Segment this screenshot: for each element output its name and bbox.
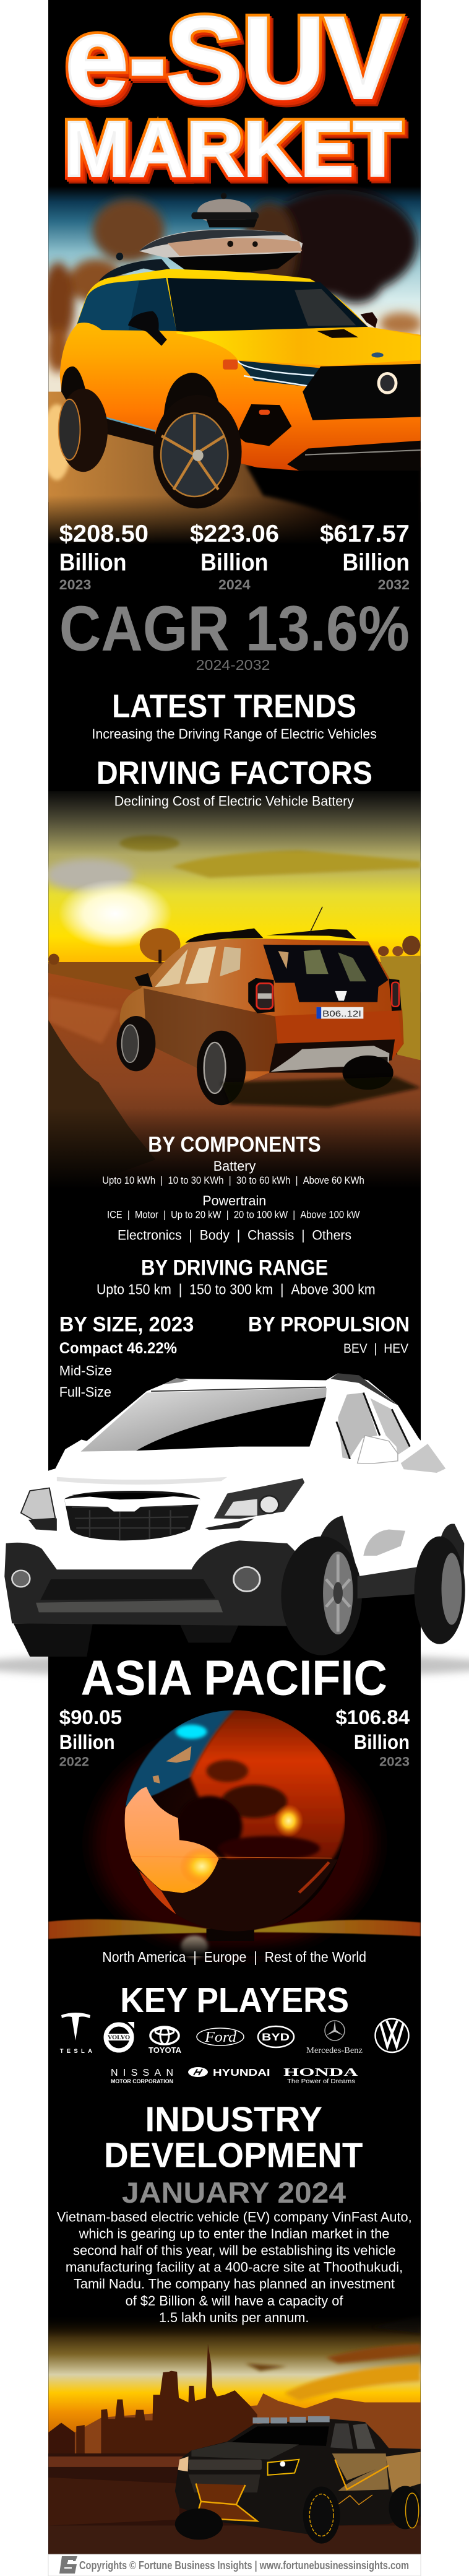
Asia Pacific 2023 value <box>335 1706 410 1769</box>
stat 2024: 2024 <box>218 577 251 592</box>
number plate <box>316 1007 363 1019</box>
sunset top fade <box>48 786 421 854</box>
car ground shadow <box>0 1653 469 1678</box>
white SUV image <box>4 1373 465 1657</box>
heading: BY DRIVING RANGE <box>141 1255 328 1280</box>
logo: Toyota: TOYOTA <box>148 2045 182 2055</box>
roof cargo pod <box>99 193 303 281</box>
mirrors <box>128 311 167 346</box>
other components: Electronics | Body | Chassis | Others <box>118 1228 351 1243</box>
side gold reflection <box>332 2453 389 2491</box>
industry development text: second half of this year, will be establishing its vehicle <box>73 2243 396 2258</box>
industry development heading: INDUSTRY <box>145 2100 322 2140</box>
battery options: Upto 10 kWh | 10 to 30 KWh | 30 to 60 kWh | Above 60 KWh <box>102 1174 364 1186</box>
stat 2024: $223.06 <box>190 521 279 547</box>
Asia Pacific 2022 value: $90.05 <box>59 1706 122 1728</box>
footer <box>48 2554 421 2576</box>
logo: Nissan <box>111 2068 173 2084</box>
logo: Honda: The Power of Dreams <box>287 2078 355 2085</box>
stat 2032: 2032 <box>378 577 410 592</box>
industry development text: 1.5 lakh units per annum. <box>159 2310 309 2325</box>
grille <box>189 2460 262 2470</box>
globe bottom fade <box>48 1938 421 1956</box>
logo: Ford: Ford <box>204 2029 237 2045</box>
Asia Pacific 2022 value: Billion <box>59 1731 115 1753</box>
logo: Volkswagen <box>375 2019 408 2052</box>
truck image: city at dusk <box>48 2315 422 2554</box>
Asia Pacific 2022 value: 2022 <box>59 1755 89 1769</box>
light bar <box>252 2416 330 2424</box>
islands <box>153 1746 191 1784</box>
dusk sky <box>48 2315 421 2453</box>
logo: Nissan: NISSAN <box>111 2068 173 2078</box>
body <box>119 939 404 1088</box>
stat 2032: $617.57 <box>320 521 410 547</box>
globe sphere <box>125 1710 345 1932</box>
by driving range section <box>97 1255 376 1298</box>
stat 2023: $208.50 <box>59 521 148 547</box>
title line: e-SUV: e-SUV <box>69 0 405 127</box>
industry development text: Vietnam-based electric vehicle (EV) company VinFast Auto, <box>57 2209 412 2224</box>
hood <box>176 327 421 366</box>
logo <box>335 991 347 1001</box>
stat 2024 <box>190 521 279 592</box>
logo: Tesla <box>60 2013 92 2055</box>
sunset image: rear SUV on dirt road <box>45 791 421 1199</box>
city skyline <box>76 2344 257 2453</box>
regional image: glowing globe <box>48 1707 421 1958</box>
logo: Ford <box>197 2028 244 2045</box>
stat 2023 <box>59 521 148 592</box>
stat 2032 <box>320 521 410 592</box>
logo: Volvo: VOLVO <box>108 2034 130 2040</box>
heading: BY SIZE, 2023 <box>59 1312 194 1336</box>
logo: Honda: HONDA <box>283 2066 358 2078</box>
side windows <box>77 278 176 331</box>
battery: Battery <box>213 1158 256 1174</box>
title line: MARKET: MARKET <box>64 105 402 193</box>
windshield <box>81 1388 327 1452</box>
truck body <box>175 2419 421 2535</box>
fog lights <box>12 1571 30 1587</box>
roof rails <box>186 929 263 943</box>
roof rails <box>330 1373 398 1405</box>
stat 2023: 2023 <box>59 577 91 592</box>
powertrain options: ICE | Motor | Up to 20 kW | 20 to 100 kW | Above 100 kW <box>107 1208 360 1220</box>
logo: Toyota <box>148 2027 182 2055</box>
industry development heading: DEVELOPMENT <box>104 2136 363 2175</box>
heading: BY PROPULSION <box>248 1312 410 1336</box>
table band <box>48 1919 421 1939</box>
sky <box>48 186 421 502</box>
tail lights <box>248 978 275 1013</box>
other regions: North America | Europe | Rest of the World <box>102 1949 366 1965</box>
grass verge <box>48 1020 155 1163</box>
left headlight <box>21 1488 55 1520</box>
date: JANUARY 2024 <box>122 2176 346 2209</box>
sun <box>58 879 172 948</box>
logo: Hyundai: HYUNDAI <box>213 2068 270 2078</box>
powertrain: Powertrain <box>202 1193 266 1208</box>
title line: MARKET: MARKET <box>66 107 403 194</box>
footer background <box>48 2554 421 2576</box>
sunset sky <box>48 791 421 964</box>
wheels <box>117 1016 155 1071</box>
Asia Pacific 2023 value: $106.84 <box>335 1706 410 1728</box>
stat 2032: Billion <box>343 550 410 576</box>
road <box>48 973 421 1199</box>
front intake <box>236 404 291 446</box>
ground shadow <box>244 456 421 531</box>
bumper <box>270 1046 389 1072</box>
rear wheel <box>437 1524 464 1576</box>
dust clouds <box>42 189 422 373</box>
side windows <box>155 949 188 987</box>
market stats <box>59 521 410 592</box>
body silhouette <box>4 1373 464 1578</box>
lower bumper <box>4 1540 311 1626</box>
front wheel <box>311 1516 359 1604</box>
hood creases <box>57 1477 227 1485</box>
key players logos <box>60 2013 408 2085</box>
by components section <box>102 1133 364 1243</box>
logo: BYD: BYD <box>262 2031 290 2043</box>
mid-size: Mid-Size <box>59 1363 112 1378</box>
windshield <box>168 278 368 332</box>
trees <box>48 928 420 965</box>
industry development text: of $2 Billion & will have a capacity of <box>126 2293 343 2309</box>
continent <box>123 1787 219 1893</box>
mirror <box>135 973 153 987</box>
desert ground <box>48 2453 421 2554</box>
wheel arches and sill <box>163 373 219 415</box>
lower intake <box>40 1579 215 1600</box>
logo: Volvo <box>104 2022 134 2050</box>
grille <box>64 1491 200 1540</box>
mirror <box>358 1436 398 1464</box>
bumper accent <box>196 2484 257 2521</box>
sunset bottom fade <box>48 1108 421 1189</box>
Asia Pacific 2022 value <box>59 1706 122 1769</box>
ocean blue <box>124 1707 239 1807</box>
industry development text: which is gearing up to enter the Indian market in the <box>79 2226 389 2241</box>
number plate: B06..12I <box>322 1009 361 1019</box>
truck top fade <box>48 2313 421 2338</box>
windows <box>230 2426 329 2446</box>
red cloud mass <box>190 1707 347 1860</box>
front wheel <box>153 395 242 508</box>
tyres under body <box>14 1623 93 1657</box>
side windows <box>338 1393 377 1459</box>
hero bottom fade <box>48 495 421 545</box>
driving factors text: Declining Cost of Electric Vehicle Battery <box>114 793 354 809</box>
hero image: orange SUV <box>42 186 422 547</box>
hot spot <box>273 1804 304 1837</box>
right headlight <box>214 1478 304 1519</box>
headlights <box>268 2460 299 2475</box>
ground <box>48 392 421 547</box>
logo: Hyundai <box>188 2067 270 2078</box>
by propulsion section <box>248 1312 410 1356</box>
title <box>64 0 405 196</box>
mountains <box>48 2393 421 2453</box>
latest trends text: Increasing the Driving Range of Electric Vehicles <box>92 726 377 742</box>
lower reflection <box>129 1860 338 1934</box>
car body <box>60 269 421 471</box>
fields <box>48 962 421 992</box>
options: BEV | HEV <box>343 1342 408 1356</box>
lower bumper <box>287 441 421 471</box>
latest trends heading: LATEST TRENDS <box>112 688 356 725</box>
logo: Mercedes-Benz: Mercedes-Benz <box>306 2046 363 2055</box>
title line: MARKET: MARKET <box>64 105 402 193</box>
industry development text: Tamil Nadu. The company has planned an investment <box>74 2276 395 2292</box>
footer logo <box>59 2556 77 2574</box>
logo: Honda <box>283 2066 358 2085</box>
rear window <box>263 945 388 1002</box>
hood <box>191 2442 299 2460</box>
industry development text: manufacturing facility at a 400-acre site at Thoothukudi, <box>66 2259 403 2275</box>
clouds <box>245 2315 421 2401</box>
door shading <box>401 1444 445 1473</box>
logo: Nissan: MOTOR CORPORATION <box>111 2078 173 2084</box>
background glow <box>94 1732 376 1953</box>
by size section <box>59 1312 194 1400</box>
logo: Tesla: TESLA <box>60 2048 92 2055</box>
compact share: Compact 46.22% <box>59 1340 177 1357</box>
Asia Pacific 2023 value: 2023 <box>379 1755 410 1769</box>
key players heading: KEY PLAYERS <box>120 1980 349 2020</box>
Asia Pacific 2023 value: Billion <box>354 1731 410 1753</box>
CAGR period: 2024-2032 <box>196 657 270 673</box>
rear wheel <box>64 389 108 472</box>
globe surface <box>123 1707 347 1934</box>
driving factors heading: DRIVING FACTORS <box>97 755 372 791</box>
industry development text <box>57 2209 412 2325</box>
full-size: Full-Size <box>59 1384 111 1400</box>
black panel <box>48 0 421 2554</box>
title line: MARKET: MARKET <box>67 109 405 196</box>
wheels <box>303 2486 340 2544</box>
logo: BYD <box>258 2026 294 2047</box>
heading: BY COMPONENTS <box>148 1133 321 1157</box>
headlight <box>238 361 320 386</box>
industry development heading <box>104 2100 363 2175</box>
logo: Mercedes-Benz <box>306 2021 363 2055</box>
Asia Pacific heading: ASIA PACIFIC <box>80 1650 387 1705</box>
stat 2024: Billion <box>200 550 269 576</box>
side sill <box>358 1564 437 1598</box>
CAGR value: CAGR 13.6% <box>59 593 410 664</box>
road shadow <box>222 1077 421 1107</box>
grille <box>303 364 421 420</box>
stat 2023: Billion <box>59 550 126 576</box>
options: Upto 150 km | 150 to 300 km | Above 300 km <box>97 1281 376 1298</box>
